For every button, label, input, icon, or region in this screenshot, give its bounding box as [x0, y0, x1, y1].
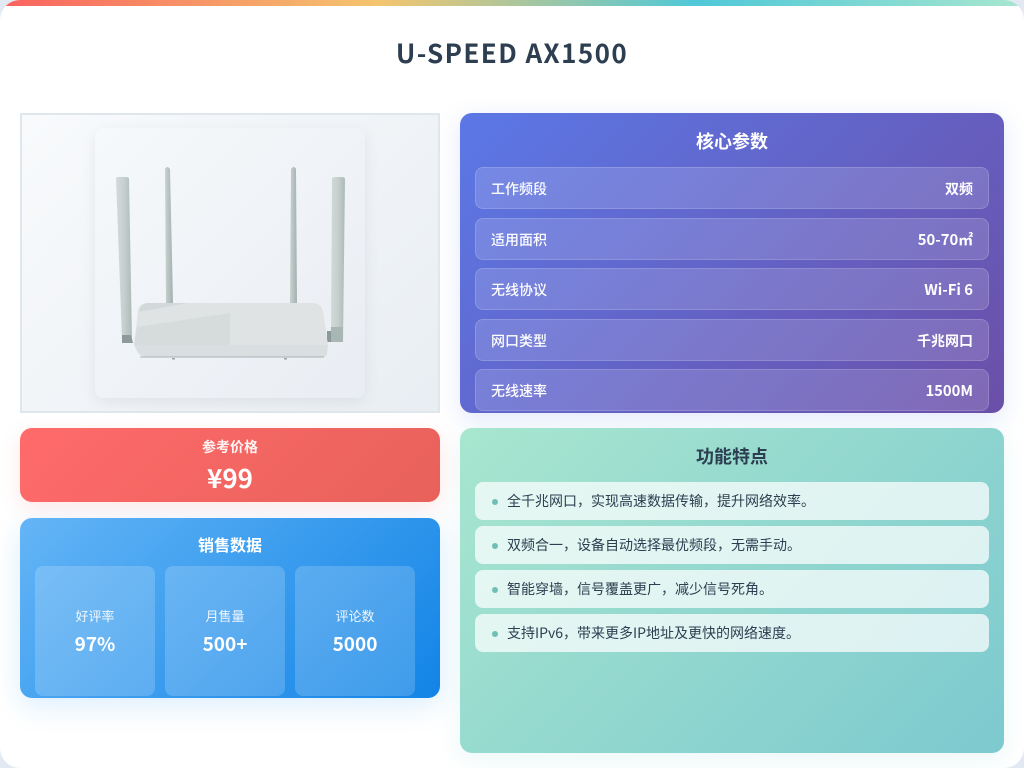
- parameter row: protocol: [475, 268, 989, 310]
- feature item 3: 智能穿墙，信号覆盖更广，减少信号死角。: [507, 579, 773, 599]
- product photo card: [95, 128, 365, 398]
- stat card: monthly sales: 月售量: [205, 606, 244, 625]
- panel: features: [460, 428, 1004, 753]
- parameter row: band: [475, 167, 989, 209]
- heading: core parameters: 核心参数: [696, 128, 768, 154]
- panel: core parameters: [460, 113, 1004, 413]
- feature item 1: 全千兆网口，实现高速数据传输，提升网络效率。: [507, 491, 815, 511]
- icon: wireless router with four antennas: [116, 167, 345, 360]
- parameter row: speed: 无线速率: [491, 381, 547, 401]
- left outer antenna: [116, 177, 132, 342]
- parameter row: area: [475, 218, 989, 260]
- price label: 参考价格: [202, 437, 258, 457]
- feature item 4: [475, 614, 989, 652]
- right outer antenna: [330, 177, 345, 342]
- stat card: monthly sales: [165, 566, 285, 696]
- parameter row: port type: 网口类型: [491, 331, 547, 351]
- panel: price: [20, 428, 440, 502]
- parameter row: band: 双频: [945, 179, 973, 199]
- feature item 1: [475, 482, 989, 520]
- left inner antenna: [165, 167, 173, 303]
- parameter row: band: 工作频段: [491, 179, 547, 199]
- parameter row: protocol: Wi-Fi 6: [924, 279, 973, 300]
- stat card: monthly sales: 500+: [203, 630, 247, 657]
- parameter row: port type: 千兆网口: [917, 331, 973, 351]
- router darker facet: [134, 313, 230, 345]
- parameter row: area: 适用面积: [491, 230, 547, 250]
- right inner antenna: [290, 167, 297, 303]
- parameter row: port type: [475, 319, 989, 361]
- price value: ¥99: [207, 459, 253, 496]
- stat card: rating: [35, 566, 155, 696]
- title: U-SPEED AX1500: [396, 34, 628, 71]
- feature item 2: [475, 526, 989, 564]
- panel: sales data: [20, 518, 440, 698]
- stat card: reviews: 评论数: [335, 606, 374, 625]
- stat card: rating: 好评率: [75, 606, 114, 625]
- stat card: reviews: 5000: [333, 630, 377, 657]
- parameter row: area: 50-70㎡: [918, 229, 973, 250]
- feature item 2: 双频合一，设备自动选择最优频段，无需手动。: [507, 535, 801, 555]
- antenna hinges: [122, 335, 133, 343]
- heading: features: 功能特点: [696, 443, 768, 469]
- heading: sales data: 销售数据: [198, 532, 262, 556]
- parameter row: protocol: 无线协议: [491, 280, 547, 300]
- parameter row: speed: 1500M: [925, 380, 973, 401]
- parameter row: speed: [475, 369, 989, 411]
- stat card: rating: 97%: [75, 630, 115, 657]
- stat card: reviews: [295, 566, 415, 696]
- router top face: [134, 303, 328, 345]
- feature item 4: 支持IPv6，带来更多IP地址及更快的网络速度。: [507, 623, 800, 643]
- router base: [134, 344, 328, 357]
- top gradient bar: [0, 0, 1024, 6]
- feature item 3: [475, 570, 989, 608]
- panel: product image: [20, 113, 440, 413]
